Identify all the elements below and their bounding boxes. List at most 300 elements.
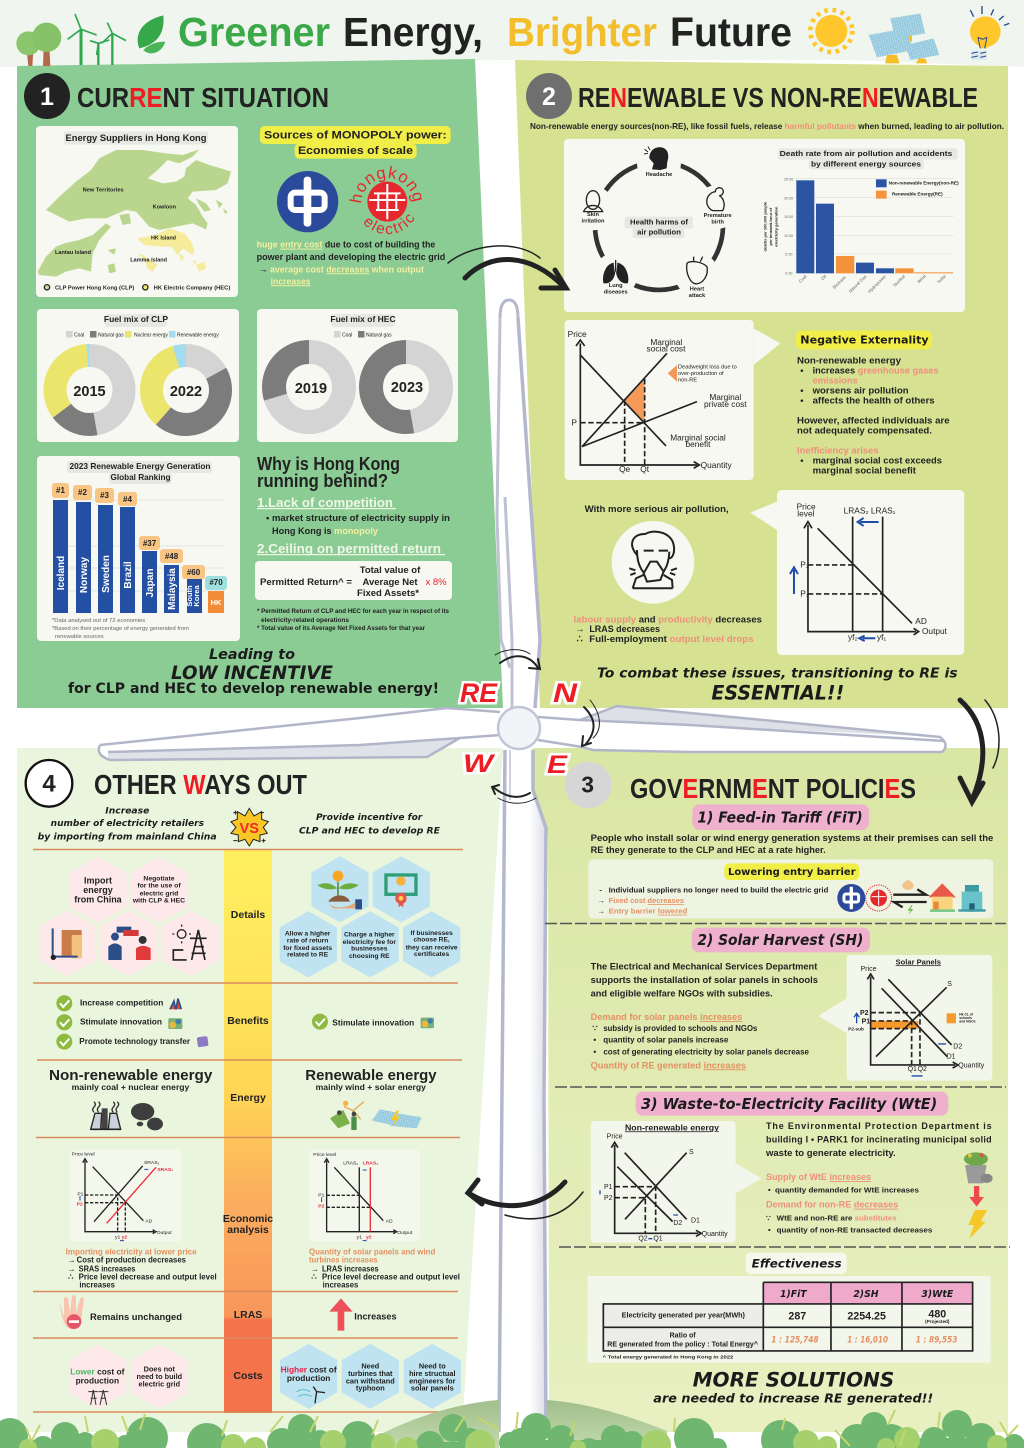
text: negative externality: not adequately compensated.: [797, 425, 932, 435]
costs: right hexagons: can withstand: [346, 1376, 395, 1385]
card: fuel mix of HEC: 2023: [391, 380, 423, 396]
header title row: [16, 6, 1009, 66]
benefits list: Increase competition: [80, 999, 163, 1008]
text: waste to electricity effects: quantity demanded for WtE increases: [775, 1186, 919, 1195]
text: lack of competition: • market structure of electricity supply in: [266, 513, 450, 524]
diagram: health harms cycle: Heart: [690, 287, 704, 293]
formula box: Average Net: [362, 577, 418, 588]
details: incentive hexagons: If businesses: [411, 930, 453, 937]
details: import hexagons: with CLP & HEC: [132, 897, 185, 904]
energy headings: mainly coal + nuclear energy: [72, 1082, 190, 1092]
benefits list: Promote technology transfer: [79, 1037, 190, 1046]
grass blades: [26, 1410, 1018, 1446]
LRAS row: increases: [329, 1298, 397, 1331]
chart: externality supply and demand: private cost: [704, 399, 747, 409]
chart: solar panels subsidy: schools: [959, 1016, 972, 1020]
costs: right hexagons: production: [287, 1373, 330, 1383]
option headings: CLP and HEC to develop RE: [299, 826, 440, 836]
diagram: health harms cycle: air pollution: [637, 228, 681, 237]
costs: right hexagons: engineers for: [409, 1376, 456, 1385]
chart: externality supply and demand: Marginal: [650, 337, 682, 347]
chart: LRAS increase: y1: [357, 1235, 362, 1241]
table card: (Projected): [925, 1319, 950, 1324]
pill: solar harvest: 2) Solar Harvest (SH): [697, 932, 863, 949]
left blade: [99, 708, 500, 760]
card: fuel mix of HEC: [257, 309, 458, 442]
text: negative externality: marginal social cost exceeds: [813, 455, 942, 465]
header title row: Energy,: [343, 9, 483, 55]
header title row: Brighter: [507, 9, 657, 55]
details: import hexagons: energy: [83, 885, 113, 895]
costs: left hexagons: Lower cost of: [70, 1366, 125, 1376]
pill: effectiveness: [746, 1253, 847, 1274]
bar chart: death rate by energy source: deaths per 100,000 people: [762, 201, 767, 251]
chart: solar panels subsidy: P2: [860, 1010, 869, 1017]
text: economic analysis left: increases: [79, 1280, 115, 1290]
details: incentive hexagons: for fixed assets: [283, 945, 332, 952]
intro sentence: Non-renewable energy sources(non-RE), like fossil fuels, release harmful pollutants when burned, leading to air pollution.: [530, 121, 1004, 131]
icon: wind turbines: [68, 14, 126, 65]
chart: LRAS increase: AD: [386, 1218, 393, 1224]
text: waste to electricity effects: quantity of non-RE transacted decreases: [777, 1225, 932, 1234]
bar chart: death rate by energy source: 5.00: [785, 253, 792, 257]
bar country labels: Sweden: [101, 555, 112, 593]
text and icon: serious air pollution: ∴: [577, 634, 583, 644]
text: economies of scale explanation: huge entry cost due to cost of building the: [257, 240, 435, 250]
text: solar harvest effects: •: [593, 1047, 596, 1056]
card: lowering entry barrier: Individual suppliers no longer need to build the electric grid: [609, 885, 829, 894]
text: negative externality: emissions: [813, 375, 858, 385]
rank labels: #3: [100, 491, 109, 500]
text: solar harvest description: The Electrical and Mechanical Services Department: [591, 961, 817, 971]
chart: externality supply and demand: Qt: [640, 464, 650, 474]
text: solar harvest effects: •: [593, 1036, 596, 1045]
card: renewable energy ranking bar chart: [37, 456, 240, 641]
details: incentive hexagons: related to RE: [287, 952, 329, 959]
table card: ^ Total energy generated in Hong Kong in 2022: [603, 1354, 734, 1360]
rank labels: #70: [209, 578, 223, 587]
text: solar harvest effects: Quantity of RE generated increases: [591, 1060, 746, 1070]
text: economic analysis left: →: [67, 1255, 76, 1265]
card: fuel mix of HEC: 2019: [295, 381, 327, 397]
card: lowering entry barrier: →: [597, 907, 605, 916]
diagram: health harms cycle: irritation: [582, 218, 605, 224]
heading: why is Hong Kong running behind: Why is Hong Kong: [257, 454, 400, 474]
option headings: number of electricity retailers: [51, 819, 204, 829]
energy headings: Non-renewable energy: [49, 1068, 212, 1084]
footnotes: permitted return: * Permitted Return of CLP and HEC for each year in respect of its: [257, 609, 450, 615]
column labels: Benefits: [227, 1015, 269, 1027]
icon: CLP logo: [277, 171, 338, 232]
chart legend: CLP: [66, 331, 219, 338]
card: energy suppliers map: Energy Suppliers in Hong Kong: [66, 133, 206, 143]
policy 3: waste-to-electricity: [591, 1092, 993, 1243]
text: negative externality: Negative Externality: [800, 334, 929, 347]
card: lowering entry barrier: Fixed cost decreases: [609, 896, 684, 905]
details: import hexagons: Negotiate: [143, 875, 175, 882]
panel: renewable vs non-renewable: [526, 73, 1004, 704]
letter W: W: [463, 750, 496, 778]
heading: sources of monopoly power: [260, 126, 451, 159]
conclusion: more solutions: [653, 1369, 933, 1405]
costs: right hexagons: turbines that: [348, 1369, 393, 1378]
table card: 2254.25: [847, 1310, 886, 1322]
chart: non-renewable energy market: Price: [607, 1133, 623, 1140]
heading: sources of monopoly power: Sources of MONOPOLY power:: [264, 129, 447, 141]
bar chart: death rate by energy source: 0.00: [785, 272, 792, 276]
icon: VS burst: [231, 808, 268, 846]
chart: non-renewable energy market: Quantity: [702, 1231, 728, 1238]
benefits list: Stimulate innovation: [332, 1018, 414, 1027]
column labels: Economic: [223, 1213, 273, 1225]
diagram: health harms cycle: [571, 141, 740, 299]
bar country labels: Korea: [192, 585, 201, 607]
donut chart: CLP 2015: [55, 356, 124, 424]
dashed divider: [555, 1086, 1006, 1088]
pill: effectiveness: Effectiveness: [752, 1257, 842, 1271]
text: economic analysis right: Quantity of solar panels and wind: [309, 1247, 435, 1257]
chart: LRAS shift: Output: [922, 626, 948, 636]
table card: 287: [788, 1310, 806, 1322]
conclusion: more solutions: are needed to increase RE generated!!: [653, 1391, 933, 1405]
bar chart: death rate by energy source: Wind: [916, 273, 927, 284]
details: incentive hexagons: [281, 857, 459, 976]
text: ceiling on permitted return: 2.Ceiling on permitted return: [257, 541, 441, 556]
bar chart: death rate by energy source: 25.00: [784, 177, 793, 181]
details: incentive hexagons: Charge a higher: [344, 932, 395, 939]
text: negative externality: [796, 331, 950, 475]
pill: solar harvest: [692, 928, 870, 952]
icon: Hong Kong Electric logo: hongkong: [349, 166, 422, 203]
chart: LRAS shift: yf₁: [877, 632, 886, 642]
card: renewable energy ranking bar chart: Global Ranking: [110, 473, 171, 482]
benefits list: [56, 995, 434, 1050]
dark bushes: [0, 1410, 1024, 1448]
chart: non-renewable energy market: P1: [604, 1184, 613, 1191]
bar country labels: Malaysia: [167, 568, 178, 610]
wind turbine illustration: [99, 300, 946, 1448]
chart: non-renewable energy market: [591, 1121, 762, 1243]
number badge 1: 1: [40, 83, 54, 111]
option headings: by importing from mainland China: [38, 832, 217, 842]
title text: Greener: [178, 9, 330, 55]
number badge 4: 4: [42, 771, 56, 798]
chart: SRAS shift: Output: [157, 1230, 172, 1236]
benefits list: Stimulate innovation: [80, 1018, 162, 1027]
text and icon: serious air pollution: With more serious air pollution,: [585, 504, 729, 514]
details: import hexagons: [40, 858, 218, 975]
conclusion: low incentive: [68, 647, 439, 697]
footnotes: permitted return: * Total value of its Average Net Fixed Assets for that year: [257, 626, 426, 632]
bar chart: death rate by energy source: 15.00: [784, 215, 793, 219]
text: waste to electricity description: waste to generate electricity.: [765, 1148, 896, 1158]
details: import hexagons: from China: [74, 894, 123, 904]
table card: 480: [928, 1308, 946, 1320]
header title row: Future: [670, 9, 792, 55]
chart: solar panels subsidy: Quantity: [958, 1063, 985, 1070]
bar chart: death rate by energy source: Nuclear: [892, 273, 907, 288]
LRAS row: remains unchanged: Remains unchanged: [90, 1312, 182, 1322]
bar country labels: Norway: [79, 557, 90, 593]
footnotes: permitted return: [257, 609, 450, 632]
bar chart: death rate by energy source: per terawatt-hour of: [768, 207, 773, 245]
bar country labels: Iceland: [56, 556, 67, 590]
bar country labels: Brazil: [123, 561, 134, 589]
chart: externality supply and demand: Marginal: [709, 392, 741, 402]
chart: LRAS shift: P₁: [800, 589, 809, 599]
effectiveness table: [588, 1253, 991, 1363]
chart: SRAS shift: [70, 1150, 182, 1242]
text: lack of competition: Hong Kong is monopoly: [272, 526, 379, 537]
pill: feed-in tariff: 1) Feed-in Tariff (FiT): [697, 809, 863, 826]
card: renewable energy ranking bar chart: 2023 Renewable Energy Generation: [70, 462, 211, 471]
chart: SRAS shift: P1: [77, 1192, 84, 1198]
text: economic analysis right: turbines increases: [309, 1255, 378, 1265]
icon: VS burst: VS: [240, 821, 259, 837]
chart legend: CLP: Coal: [74, 332, 84, 338]
chart legend: CLP: Natural gas: [98, 332, 124, 338]
map of Hong Kong: New Territories: [83, 188, 124, 194]
chart legend: CLP: Nuclear energy: [134, 332, 168, 338]
details: import hexagons: electric grid: [140, 890, 178, 897]
card: lowering entry barrier: →: [597, 896, 605, 905]
icon: sun: [810, 10, 852, 52]
text: lack of competition: [257, 495, 450, 537]
diagram: health harms cycle: Headache: [646, 172, 672, 178]
column labels: Details: [231, 909, 265, 921]
text: waste to electricity description: building I • PARK1 for incinerating municipal solid: [766, 1134, 992, 1144]
letter N: N: [553, 678, 578, 708]
chart: solar panels subsidy: P1: [862, 1018, 870, 1025]
card: lowering entry barrier: -: [599, 885, 602, 894]
text: solar harvest effects: cost of generating electricity by solar panels decrease: [603, 1047, 810, 1056]
map of Hong Kong: HK Island: [151, 235, 176, 241]
text: negative externality: •: [800, 385, 804, 395]
heading: government policies: GOVERNMENT POLICIES: [630, 773, 916, 804]
text: waste to electricity effects: •: [768, 1225, 771, 1234]
energy headings: Renewable energy: [305, 1068, 437, 1084]
chart: LRAS shift: level: [797, 509, 815, 519]
diagram: health harms cycle: diseases: [604, 289, 628, 295]
text: solar harvest effects: Demand for solar panels increases: [591, 1012, 742, 1022]
chart: non-renewable energy market: Q2: [638, 1236, 648, 1243]
bar chart: death rate by energy source: Coal: [798, 274, 808, 284]
map of Hong Kong: [38, 149, 231, 277]
bar chart: death rate by energy source: electricity generation: [774, 206, 779, 247]
table divider lines: [33, 850, 463, 1412]
panel: section 4 background: [17, 748, 503, 1432]
chart: LRAS increase: Price level: [313, 1152, 336, 1158]
text: solar harvest effects: ∵: [592, 1024, 597, 1033]
card: health harms and death rate: [564, 139, 965, 312]
rank labels: #48: [165, 552, 179, 561]
column labels: [223, 909, 273, 1382]
text: waste to electricity effects: Demand for non-RE decreases: [766, 1200, 898, 1210]
pill: waste to electricity: [636, 1092, 948, 1116]
chart legend: CLP: Renewable energy: [177, 332, 219, 338]
table card: 2)SH: [853, 1289, 879, 1300]
costs: left hexagons: Does not: [144, 1365, 176, 1374]
chart: LRAS increase: P2: [318, 1204, 325, 1210]
text: economic analysis right: →: [311, 1263, 319, 1273]
chart: externality supply and demand: Deadweight loss due to: [678, 364, 737, 370]
text: negative externality: •: [800, 395, 804, 405]
chart: externality supply and demand: Marginal social: [670, 433, 726, 443]
chart: LRAS increase: Output: [397, 1230, 413, 1236]
conclusion: essential: [597, 666, 958, 704]
text: waste to electricity description: The Environmental Protection Department is: [766, 1121, 992, 1131]
table card: [588, 1276, 991, 1363]
text: lack of competition: 1.Lack of competition: [257, 495, 393, 510]
card: lowering entry barrier: [588, 859, 993, 918]
panel: current situation: [24, 73, 458, 697]
chart: externality supply and demand: P: [571, 417, 577, 427]
details: incentive hexagons: Allow a higher: [285, 930, 331, 937]
dashed divider: [545, 922, 1006, 924]
text and icon: serious air pollution: →: [575, 624, 585, 634]
text and icon: serious air pollution: Full-employment output level drops: [589, 634, 754, 644]
text: economic analysis right: Price level decrease and output level: [322, 1271, 460, 1281]
chart: SRAS shift: AD: [145, 1218, 153, 1224]
rank tags: [52, 483, 227, 590]
diagram: health harms cycle: birth: [711, 219, 724, 225]
formula box: Permitted Return^ =: [260, 577, 352, 588]
chart: LRAS increase: y2: [366, 1235, 372, 1241]
chart: SRAS shift: y2: [122, 1235, 127, 1241]
text: economic analysis right: LRAS increases: [322, 1263, 379, 1273]
table card: Ratio of: [670, 1332, 696, 1339]
card: fuel mix of CLP: [37, 309, 239, 442]
curved arrows: [448, 246, 999, 1219]
chart: non-renewable energy market: Non-renewable energy: [625, 1123, 720, 1132]
chart: solar panels subsidy: and NGOs: [959, 1019, 976, 1023]
table card: 1 : 16,010: [847, 1336, 888, 1346]
lower tower: [499, 745, 546, 1448]
number badge 3: [565, 762, 612, 808]
pill: feed-in tariff: [692, 804, 869, 830]
central category column: [224, 849, 272, 1413]
hub: [498, 707, 540, 749]
panel: section 2 background: [515, 60, 1008, 708]
bar chart: death rate by energy source: Natural Gas: [848, 274, 868, 294]
icon: Hong Kong Electric logo: electric: [364, 214, 414, 234]
chart: non-renewable energy market: P2: [604, 1195, 613, 1202]
details: incentive hexagons: choose RE,: [413, 937, 450, 944]
chart: LRAS increase: [308, 1150, 420, 1242]
text: feed-in tariff description: RE they generate to the CLP and HEC at a rate higher.: [591, 845, 826, 855]
bar chart: death rate by energy source: Non-renewable Energy(non-RE): [889, 181, 959, 186]
text: negative externality: worsens air pollution: [812, 385, 909, 395]
card: fuel mix of CLP: 2015: [73, 384, 106, 400]
details: import hexagons: for the use of: [137, 883, 181, 890]
heading: why is Hong Kong running behind: running behind?: [257, 471, 388, 491]
chart: externality supply and demand: Quantity: [701, 460, 732, 470]
donut chart: HEC 2023: [371, 352, 441, 422]
text: economic analysis left: SRAS increases: [79, 1263, 136, 1273]
card: fuel mix of HEC: Fuel mix of HEC: [330, 314, 396, 324]
conclusion: essential: To combat these issues, transitioning to RE is: [597, 666, 958, 682]
diagram: health harms cycle: Health harms of: [630, 218, 688, 227]
number badge 1: [24, 73, 70, 119]
energy headings: mainly wind + solar energy: [316, 1082, 426, 1092]
bars: [53, 500, 224, 613]
text: economic analysis left: →: [67, 1263, 76, 1273]
chart: solar panels subsidy: Price: [861, 966, 877, 973]
table card: 3)WtE: [921, 1289, 954, 1300]
column labels: LRAS: [234, 1309, 262, 1321]
conclusion: essential: ESSENTIAL!!: [711, 681, 844, 704]
text: waste to electricity effects: ∵: [766, 1214, 771, 1223]
heading: renewable vs non-renewable: RENEWABLE VS NON-RENEWABLE: [578, 82, 978, 113]
chart: solar panels subsidy: S: [947, 981, 952, 988]
header band: [0, 0, 1024, 67]
bar chart: death rate by energy source: Hydropower: [867, 274, 887, 294]
text: economic analysis right: [309, 1247, 460, 1290]
chart: solar panels subsidy: D1: [947, 1053, 956, 1060]
table card: Electricity generated per year(MWh): [622, 1313, 745, 1320]
footnotes: *Based on their percentage of energy generated from: [52, 626, 189, 632]
icon: solar panels: [869, 13, 939, 63]
text: waste to electricity effects: WtE and non-RE are substitutes: [777, 1214, 897, 1223]
pill: waste to electricity: 3) Waste-to-Electricity Facility (WtE): [641, 1096, 937, 1113]
conclusion: low incentive: LOW INCENTIVE: [171, 662, 333, 684]
text: economic analysis left: Cost of production decreases: [77, 1255, 186, 1265]
text: economies of scale explanation: [257, 240, 446, 286]
column labels: Energy: [230, 1092, 266, 1104]
costs: right hexagons: solar panels: [411, 1383, 454, 1392]
costs: right hexagons: hire structual: [409, 1369, 456, 1378]
heading: sources of monopoly power: Economies of scale: [298, 145, 413, 157]
table card: 1 : 89,553: [916, 1336, 957, 1346]
text and icon: serious air pollution: LRAS decreases: [589, 624, 660, 634]
text: negative externality: •: [800, 455, 804, 465]
text: economic analysis left: [66, 1247, 217, 1290]
details: incentive hexagons: rate of return: [287, 937, 328, 944]
text: feed-in tariff description: People who install solar or wind energy generation systems at their premises can sell the: [591, 833, 993, 843]
rank labels: #60: [187, 568, 201, 577]
bar country labels: South: [185, 585, 194, 607]
hill and bushes footer: [0, 1400, 1024, 1448]
chart legend: HEC: Coal: [342, 332, 352, 338]
text: solar harvest effects: subsidy is provided to schools and NGOs: [603, 1024, 758, 1033]
map of Hong Kong: Lantau Island: [55, 250, 91, 256]
chart: SRAS shift: SRAS₂: [157, 1167, 173, 1173]
icons: coal plant and renewables: [91, 1101, 422, 1130]
card: lowering entry barrier: Entry barrier lowered: [609, 907, 688, 916]
chart: externality supply and demand: benefit: [685, 439, 711, 449]
donut chart: CLP 2022: [152, 356, 220, 424]
card: fuel mix of CLP: Fuel mix of CLP: [104, 314, 168, 324]
bar chart: death rate by energy source: [762, 148, 959, 294]
text: waste to electricity description: [765, 1121, 992, 1158]
number badge 2: 2: [542, 83, 556, 111]
column labels: Costs: [233, 1370, 263, 1382]
panel: other ways out: [26, 760, 463, 1413]
chart legend: HEC: [334, 331, 392, 338]
letters RE: RE: [460, 678, 498, 708]
bar country labels: HK: [211, 598, 222, 607]
heading: other ways out: OTHER WAYS OUT: [94, 769, 307, 800]
chart: SRAS shift: Price level: [72, 1152, 95, 1158]
panel: section 1 background: [17, 59, 503, 708]
icons: waste to lightning: [964, 1152, 993, 1239]
text: waste to electricity effects: •: [768, 1186, 771, 1195]
text: solar harvest description: [591, 961, 818, 999]
costs: right hexagons: [281, 1345, 460, 1408]
text: solar harvest description: and eligible welfare NGOs with subsidies.: [591, 989, 773, 999]
costs: right hexagons: Higher cost of: [281, 1364, 337, 1374]
upper tower: [497, 300, 540, 710]
